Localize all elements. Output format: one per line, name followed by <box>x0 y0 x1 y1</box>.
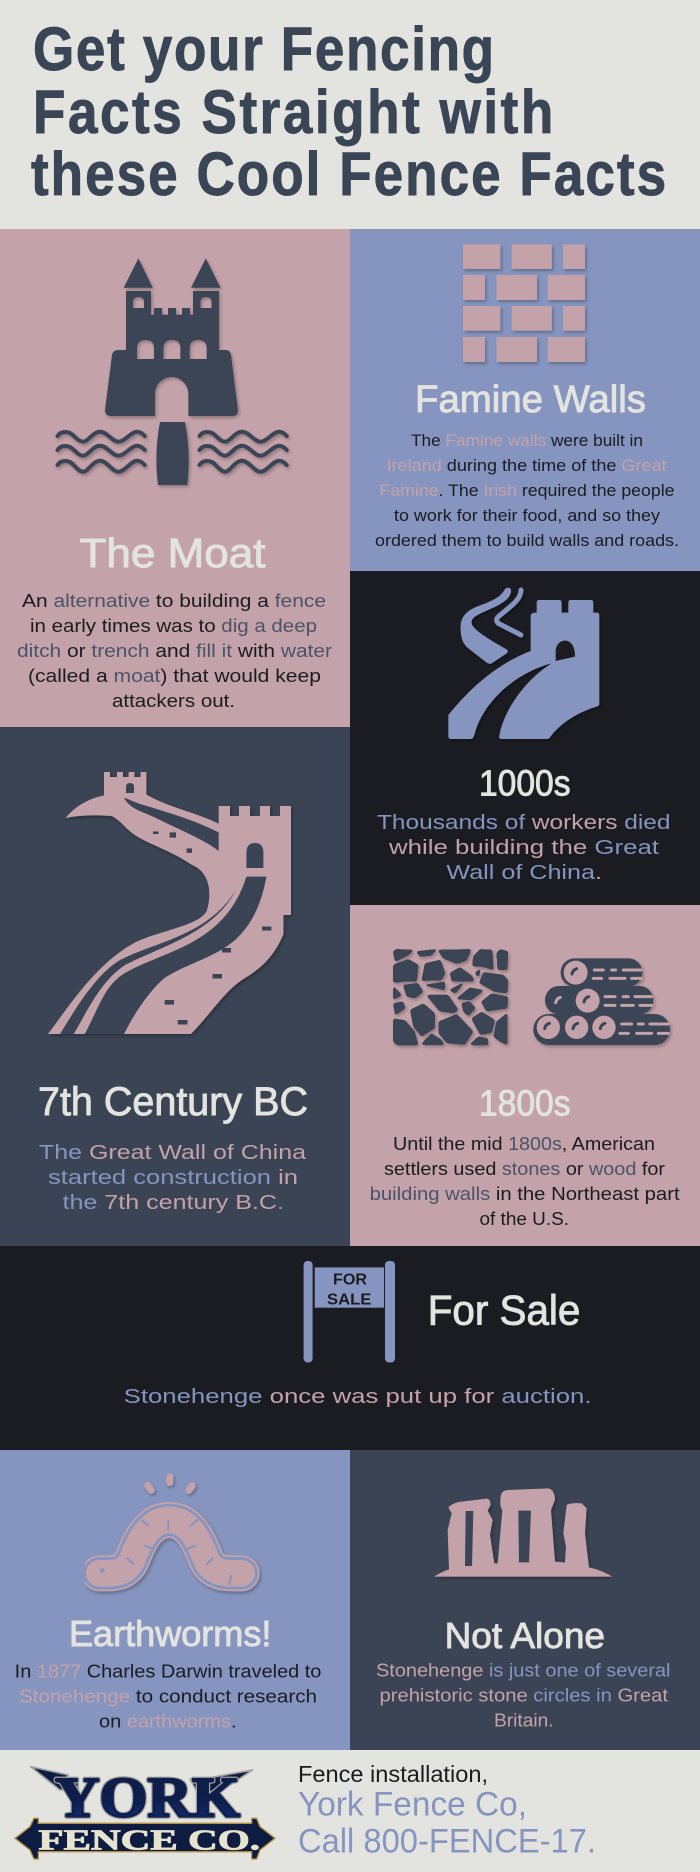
panel: not alone <box>350 1450 700 1750</box>
panel: header <box>0 0 700 229</box>
text: famine walls description: ordered them to build walls and roads. <box>375 532 679 550</box>
heading: Earthworms!: Earthworms! <box>69 1613 271 1654</box>
text: famine walls description: Famine. The Irish required the people <box>380 482 674 500</box>
text: 7th century description <box>39 1142 307 1214</box>
text: not alone description: prehistoric stone circles in Great <box>380 1686 668 1706</box>
text: moat description: (called a moat ) that would keep <box>28 666 321 686</box>
text: moat description: ditch or trench and fill it with water <box>17 641 332 661</box>
icon: great wall small <box>448 588 599 739</box>
text: 7th century description: started construction in <box>48 1167 298 1189</box>
text: famine walls description <box>375 432 679 550</box>
panel: earthworms <box>0 1450 350 1750</box>
text: moat description: An alternative to building a fence <box>22 591 326 611</box>
icon: stones <box>394 950 507 1044</box>
panel: 1000s <box>350 571 700 905</box>
icon: earthworm <box>99 1473 242 1584</box>
text: 1800s description <box>370 1134 680 1229</box>
icon: log pile <box>533 958 670 1045</box>
icon: brick wall <box>463 244 585 362</box>
text: famine walls description: Ireland during the time of the Great <box>387 457 667 475</box>
text: 1800s description: building walls in the Northeast part <box>370 1184 680 1204</box>
panel: 1800s <box>350 905 700 1246</box>
text: earthworms description: Stonehenge to conduct research <box>19 1686 317 1706</box>
logo: York Fence Co: YORK <box>55 1766 240 1829</box>
logo: York Fence Co: YORK <box>55 1766 240 1829</box>
panel: footer <box>0 1750 700 1872</box>
icon: great wall large <box>48 772 291 1034</box>
icon: for sale sign <box>304 1261 395 1362</box>
icon: castle with moat <box>58 258 287 485</box>
heading: 1000s: 1000s <box>479 762 570 804</box>
text: famine walls description: to work for their food, and so they <box>394 507 661 525</box>
title: these Cool Fence Facts <box>31 141 666 209</box>
text: moat description: attackers out. <box>112 691 235 711</box>
heading: Not Alone: Not Alone <box>445 1615 605 1656</box>
text: 1000s description: Thousands of workers died <box>377 812 670 834</box>
text: 1800s description: of the U.S. <box>480 1209 569 1229</box>
panel: for sale <box>0 1246 700 1450</box>
text: 7th century description: The Great Wall of China <box>39 1142 307 1164</box>
heading: 7th Century BC: 7th Century BC <box>38 1080 308 1124</box>
text: call to action: York Fence Co, <box>298 1786 527 1824</box>
heading: For Sale: For Sale <box>428 1287 580 1334</box>
text: 1800s description: Until the mid 1800s , American <box>393 1134 655 1154</box>
text: not alone description: Stonehenge is just one of several <box>376 1660 670 1680</box>
text: famine walls description: The Famine walls were built in <box>411 432 643 450</box>
heading: Famine Walls: Famine Walls <box>415 379 646 421</box>
panel: 7th century BC <box>0 727 350 1246</box>
title <box>31 16 666 209</box>
text: earthworms description: In 1877 Charles Darwin traveled to <box>15 1661 321 1681</box>
panel: famine walls <box>350 229 700 571</box>
logo: York Fence Co <box>15 1766 275 1859</box>
icon: for sale sign: FOR <box>333 1271 367 1288</box>
title: Get your Fencing <box>33 16 494 84</box>
text: 1000s description <box>377 812 670 884</box>
text: moat description: in early times was to dig a deep <box>30 616 317 636</box>
text: not alone description <box>376 1660 670 1730</box>
text: 1800s description: settlers used stones or wood for <box>384 1159 665 1179</box>
text: 1000s description: Wall of China . <box>446 862 602 884</box>
text: moat description <box>17 591 332 711</box>
text: not alone description: Britain. <box>494 1710 554 1730</box>
icon: for sale sign: SALE <box>327 1292 372 1308</box>
icon: stonehenge <box>434 1488 612 1577</box>
text: earthworms description <box>15 1661 321 1732</box>
title: Facts Straight with <box>33 79 553 147</box>
text: 7th century description: the 7th century B.C . <box>62 1192 284 1214</box>
heading: The Moat: The Moat <box>80 530 266 576</box>
text: for sale description: Stonehenge once was put up for auction. <box>124 1386 591 1408</box>
text: call to action <box>298 1761 596 1861</box>
heading: 1800s: 1800s <box>479 1082 570 1124</box>
panel: the moat <box>0 229 350 727</box>
logo: York Fence Co: FENCE CO. <box>38 1825 260 1856</box>
text: call to action: Fence installation, <box>298 1761 488 1787</box>
text: call to action: Call 800-FENCE-17. <box>298 1823 596 1861</box>
text: earthworms description: on earthworms . <box>99 1712 237 1732</box>
text: 1000s description: while building the Great <box>388 837 660 859</box>
